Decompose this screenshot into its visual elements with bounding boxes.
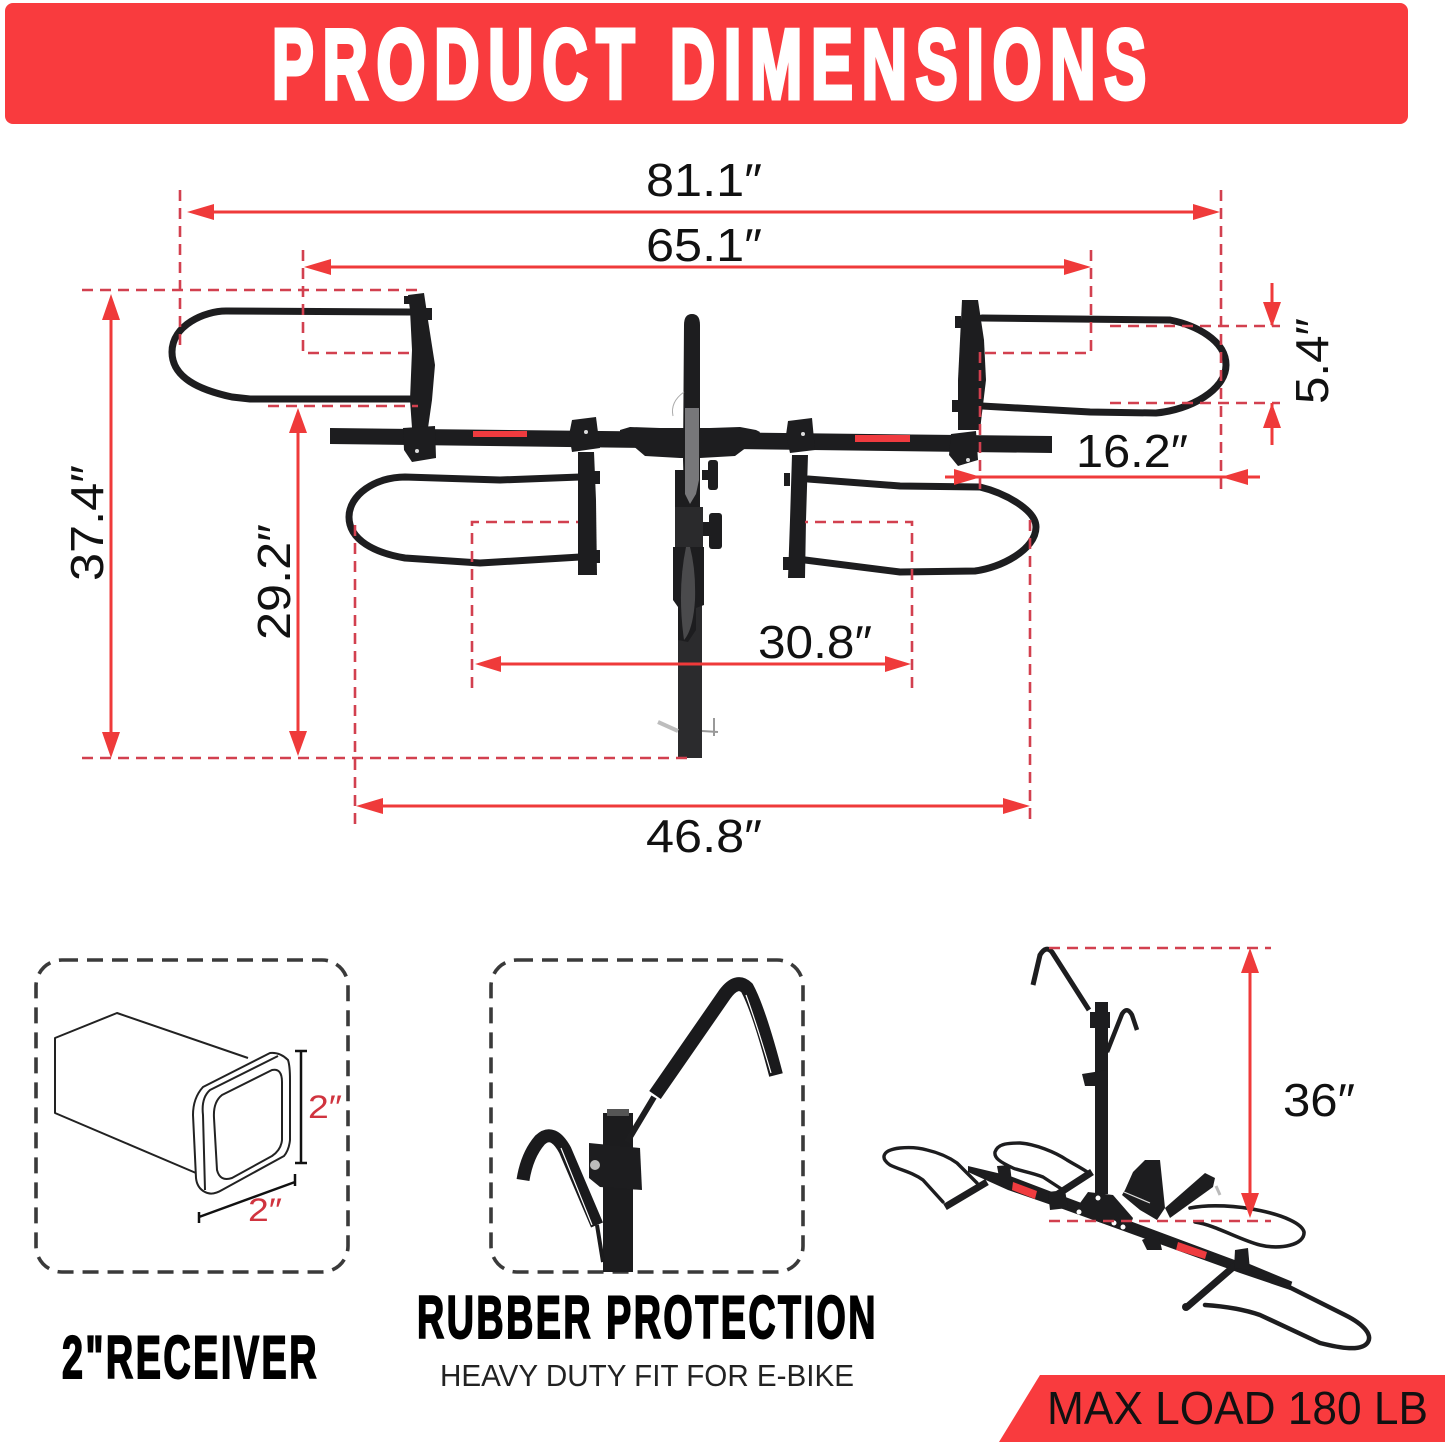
loops bbox=[884, 1148, 977, 1202]
dimension 16.2: 16.2″ bbox=[1076, 425, 1188, 477]
dimension 36 bbox=[1241, 948, 1355, 1218]
dashed height guides bbox=[1049, 948, 1271, 1221]
receiver height dimension: 2″ bbox=[308, 1089, 342, 1125]
bar clamps bbox=[403, 426, 436, 462]
dimension 65.1 bbox=[304, 219, 1091, 275]
top-view rack photo bbox=[172, 293, 1226, 758]
upright post bbox=[1095, 1002, 1108, 1194]
dimension 81.1: 81.1″ bbox=[646, 154, 762, 206]
dimension 5.4: 5.4″ bbox=[1286, 318, 1338, 404]
dimension 16.2 bbox=[945, 425, 1260, 485]
hooks bbox=[1033, 949, 1089, 1010]
dimension 29.2: 29.2″ bbox=[248, 524, 300, 640]
dimension 65.1: 65.1″ bbox=[646, 219, 762, 271]
dimension 46.8: 46.8″ bbox=[646, 810, 762, 862]
centre hook and post bbox=[678, 600, 702, 758]
panel: 2 inch receiver bbox=[36, 960, 348, 1272]
lower left loop bbox=[349, 477, 580, 563]
receiver width dimension: 2″ bbox=[248, 1192, 282, 1228]
dimension 46.8 bbox=[356, 798, 1030, 862]
dimension 29.2 bbox=[248, 408, 307, 756]
max load badge: MAX LOAD 180 LB bbox=[1047, 1382, 1428, 1434]
rack upright post and hooks bbox=[523, 984, 776, 1272]
upper right loop bbox=[982, 318, 1226, 413]
dashed guide lines bbox=[82, 190, 1280, 825]
dimension 30.8: 30.8″ bbox=[758, 616, 872, 668]
icon: receiver tube bbox=[55, 1013, 290, 1194]
centre plates and hitch bbox=[1075, 1192, 1133, 1232]
heading: rubber protection: RUBBER PROTECTION bbox=[417, 1284, 878, 1351]
perspective rack photo bbox=[884, 949, 1369, 1348]
dimension 37.4: 37.4″ bbox=[61, 465, 113, 581]
cross brackets and clamps bbox=[945, 1172, 1291, 1307]
receiver height dimension bbox=[295, 1051, 342, 1163]
receiver width dimension bbox=[199, 1174, 295, 1228]
caption: 2 inch receiver: 2"RECEIVER bbox=[62, 1324, 319, 1391]
dimension 30.8 bbox=[475, 616, 911, 672]
dimension 81.1 bbox=[187, 154, 1220, 220]
lower right loop bbox=[805, 479, 1036, 572]
panel: rubber protection bbox=[491, 960, 803, 1272]
main bar bbox=[968, 1166, 1292, 1290]
dimension 36: 36″ bbox=[1283, 1074, 1355, 1126]
upper left loop bbox=[172, 311, 412, 399]
dimension 5.4 bbox=[1263, 283, 1338, 445]
red reflectors bbox=[473, 431, 527, 437]
subheading: heavy duty: HEAVY DUTY FIT FOR E-BIKE bbox=[440, 1358, 854, 1393]
main cross bar bbox=[330, 428, 1052, 453]
max load badge bbox=[999, 1375, 1445, 1442]
dimension 37.4 bbox=[61, 294, 120, 758]
